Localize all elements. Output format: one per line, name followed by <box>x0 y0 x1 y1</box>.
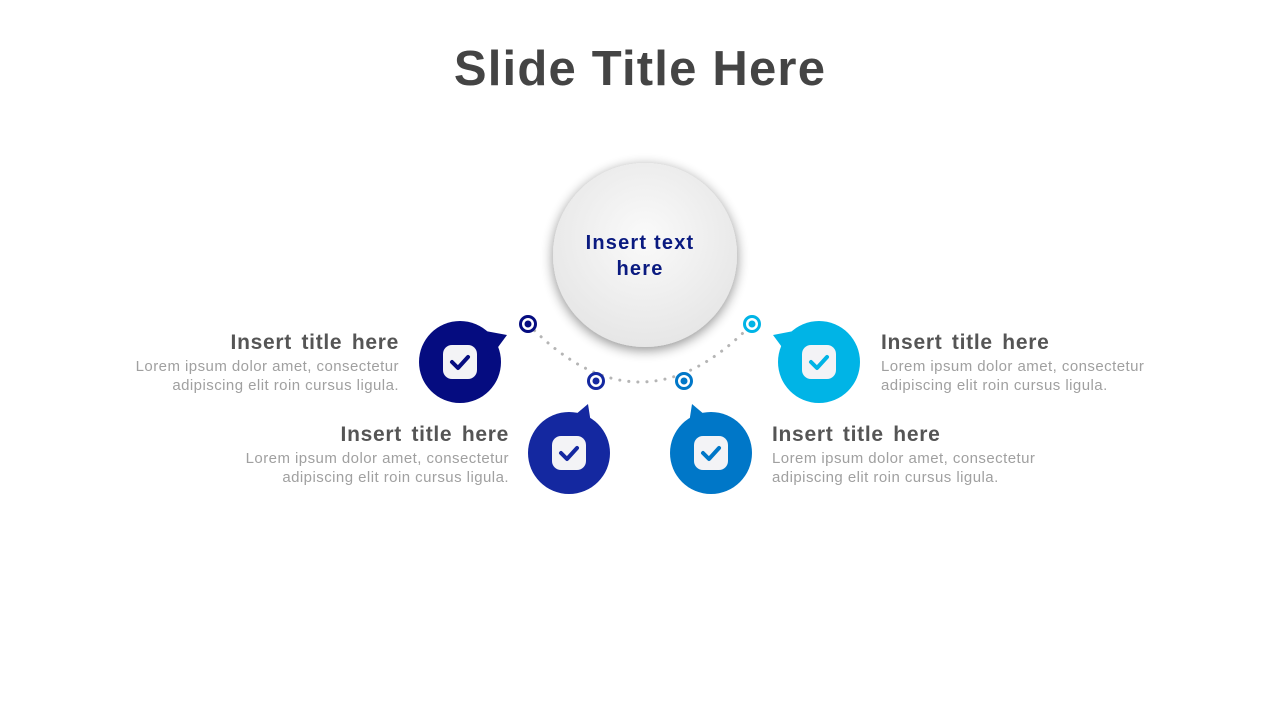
text block 4: Lorem ipsum dolor amet, consectetur <box>881 358 1144 375</box>
text block 2: Lorem ipsum dolor amet, consectetur <box>246 450 509 467</box>
text block 3: Lorem ipsum dolor amet, consectetur <box>772 450 1035 467</box>
text block 4: adipiscing elit roin cursus ligula. <box>881 377 1108 394</box>
dot markers <box>520 316 760 388</box>
text block 1: adipiscing elit roin cursus ligula. <box>172 377 399 394</box>
text block 3: adipiscing elit roin cursus ligula. <box>772 469 999 486</box>
text block 4 <box>881 331 1144 394</box>
text block 1: Lorem ipsum dolor amet, consectetur <box>136 358 399 375</box>
text block 2: Insert title here <box>341 423 509 446</box>
dotted arc <box>528 324 752 382</box>
center circle: Insert text <box>586 232 694 254</box>
center circle: here <box>616 258 664 280</box>
title: Slide Title Here <box>454 42 826 96</box>
text block 2: adipiscing elit roin cursus ligula. <box>282 469 509 486</box>
text block 3 <box>772 423 1035 486</box>
text block 4: Insert title here <box>881 331 1049 354</box>
text block 2 <box>246 423 509 486</box>
icon: bubble 3 <box>670 404 752 494</box>
icon: bubble 1 <box>419 321 507 403</box>
text block 1 <box>136 331 399 394</box>
center circle <box>553 163 737 347</box>
icon: bubble 4 <box>773 321 860 403</box>
text block 3: Insert title here <box>772 423 940 446</box>
icon: bubble 2 <box>528 404 610 494</box>
text block 1: Insert title here <box>231 331 399 354</box>
